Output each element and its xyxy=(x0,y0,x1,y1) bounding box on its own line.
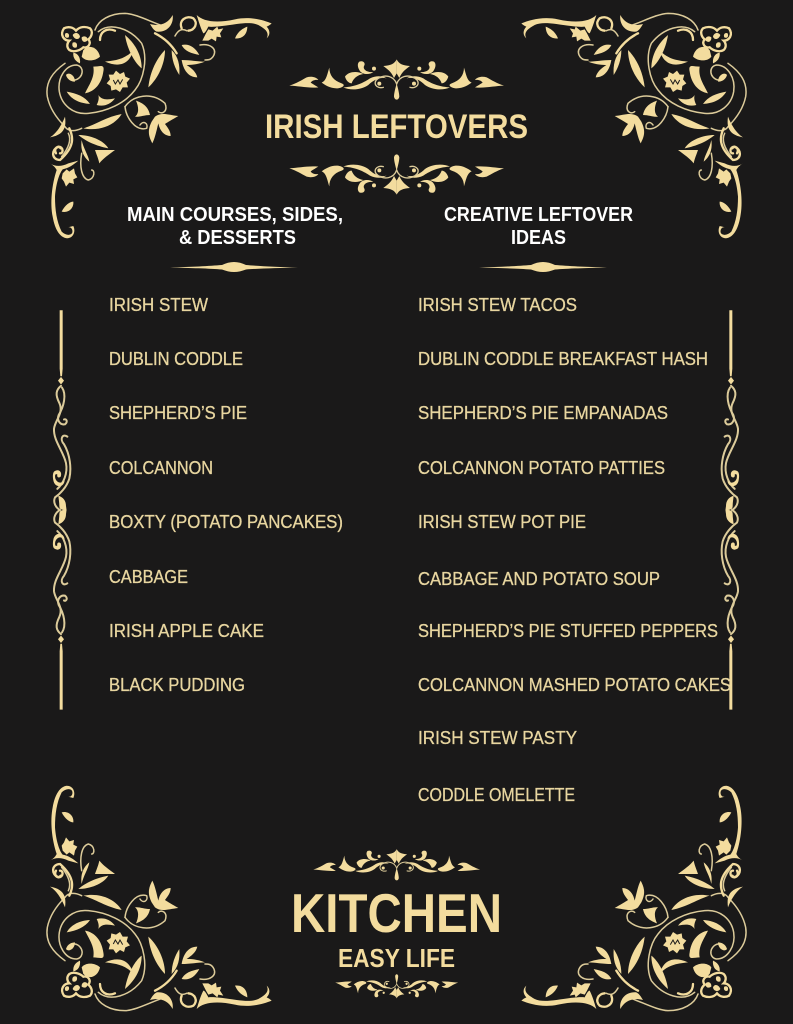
list: creative leftover ideas xyxy=(418,295,731,805)
corner ornament: top right xyxy=(521,13,746,238)
heading divider: left xyxy=(170,262,298,272)
logo ornament: top xyxy=(313,849,480,880)
list: creative leftover ideas: SHEPHERD’S PIE STUFFED PEPPERS xyxy=(418,621,718,641)
column heading: main courses: MAIN COURSES, SIDES, xyxy=(127,203,343,226)
list: main courses, sides and desserts: DUBLIN CODDLE xyxy=(109,349,243,369)
list: creative leftover ideas: COLCANNON POTATO PATTIES xyxy=(418,458,665,478)
title: IRISH LEFTOVERS xyxy=(265,108,528,146)
title ornament: bottom xyxy=(289,154,504,195)
list: creative leftover ideas: CODDLE OMELETTE xyxy=(418,785,575,805)
list: main courses, sides and desserts: SHEPHERD’S PIE xyxy=(109,403,247,423)
list: main courses, sides and desserts xyxy=(109,295,343,695)
list: creative leftover ideas: IRISH STEW POT PIE xyxy=(418,512,586,532)
corner ornament: bottom left xyxy=(47,786,272,1011)
list: main courses, sides and desserts: IRISH STEW xyxy=(109,295,208,315)
logo ornament: bottom xyxy=(335,974,458,998)
column heading: creative leftover ideas: CREATIVE LEFTOVER xyxy=(444,203,633,226)
title ornament: top xyxy=(289,59,504,100)
corner ornament: bottom right xyxy=(521,786,746,1011)
list: creative leftover ideas: COLCANNON MASHED POTATO CAKES xyxy=(418,675,731,695)
list: main courses, sides and desserts: COLCANNON xyxy=(109,458,213,478)
logo tagline: EASY LIFE xyxy=(338,943,455,973)
list: creative leftover ideas: SHEPHERD’S PIE EMPANADAS xyxy=(418,403,668,423)
side ornament: right xyxy=(722,310,739,710)
list: creative leftover ideas: IRISH STEW PASTY xyxy=(418,728,577,748)
list: creative leftover ideas: DUBLIN CODDLE BREAKFAST HASH xyxy=(418,349,708,369)
list: creative leftover ideas: CABBAGE AND POTATO SOUP xyxy=(418,569,660,589)
list: main courses, sides and desserts: IRISH APPLE CAKE xyxy=(109,621,264,641)
heading divider: right xyxy=(479,262,607,272)
column heading: creative leftover ideas xyxy=(444,203,633,249)
side ornament: left xyxy=(53,310,70,710)
list: main courses, sides and desserts: BLACK PUDDING xyxy=(109,675,245,695)
list: main courses, sides and desserts: BOXTY (POTATO PANCAKES) xyxy=(109,512,343,532)
corner ornament: top left xyxy=(47,13,272,238)
logo wordmark: KITCHEN xyxy=(291,882,502,944)
column heading: creative leftover ideas: IDEAS xyxy=(511,226,566,249)
list: creative leftover ideas: IRISH STEW TACOS xyxy=(418,295,577,315)
column heading: main courses: & DESSERTS xyxy=(179,226,296,249)
column heading: main courses xyxy=(127,203,343,249)
list: main courses, sides and desserts: CABBAGE xyxy=(109,567,188,587)
